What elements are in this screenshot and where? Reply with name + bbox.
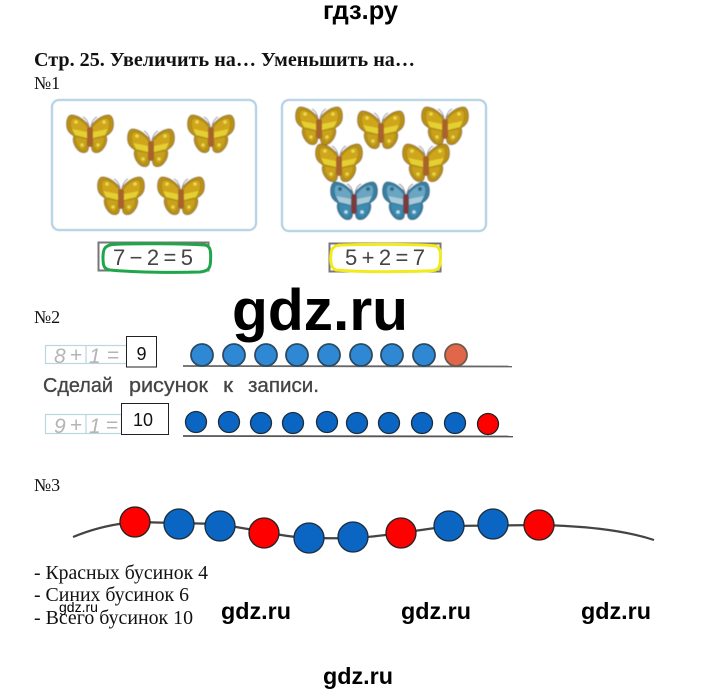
instruction text: Сделай — [43, 375, 113, 397]
page title: Стр. 25. Увеличить на… Уменьшить на… — [34, 49, 415, 71]
answer box 9: 9 — [136, 344, 147, 364]
small watermark: gdz.ru — [59, 599, 98, 615]
heading: task 1: №1 — [34, 73, 60, 93]
answer line: total beads: - Всего бусинок 10 — [34, 607, 193, 629]
curved thread — [73, 522, 654, 540]
printed equation in grid: 8 — [54, 345, 66, 368]
row of ten beads on a line — [183, 412, 513, 436]
bead string — [73, 507, 654, 553]
large watermark: gdz.ru — [232, 278, 408, 343]
answer box 10 — [122, 404, 168, 434]
instruction text: к — [223, 375, 233, 397]
butterfly group, left panel — [67, 115, 234, 215]
instruction text — [43, 375, 319, 397]
printed equation in grid: = — [106, 414, 118, 437]
example row: 8 + 1 = 9 — [46, 336, 512, 368]
watermark row: gdz.ru — [581, 598, 651, 624]
equation box: 5 + 2 = 7: 5 + 2 = 7 — [345, 245, 425, 270]
heading: task 3: №3 — [34, 475, 60, 495]
printed equation in grid: 1 — [89, 415, 101, 438]
panel: five yellow butterflies — [52, 100, 256, 230]
instruction text: рисунок — [129, 375, 208, 397]
butterfly group, right panel — [296, 107, 468, 220]
printed equation in grid: 1 — [89, 345, 101, 368]
printed equation in grid: 9 — [54, 415, 66, 438]
printed equation in grid: + — [70, 344, 82, 367]
printed equation in grid — [46, 344, 126, 368]
printed equation in grid — [46, 414, 122, 438]
equation box: 7 - 2 = 5 — [98, 242, 211, 272]
equation box: 7 - 2 = 5: 7 − 2 = 5 — [113, 245, 193, 270]
answer box 10: 10 — [133, 410, 153, 430]
answer row: 9 + 1 = 10 — [46, 404, 513, 438]
printed equation in grid: + — [70, 414, 82, 437]
beads — [120, 507, 554, 553]
answer line: red beads: - Красных бусинок 4 — [34, 562, 208, 584]
instruction text: записи. — [248, 375, 319, 397]
equation box: 5 + 2 = 7 — [330, 244, 441, 272]
printed equation in grid: = — [107, 344, 119, 367]
watermark row — [221, 598, 651, 624]
answer line: blue beads: - Синих бусинок 6 — [34, 584, 189, 606]
answer box 9 — [126, 336, 156, 367]
row of nine beads on a line — [183, 344, 512, 366]
panel: five yellow and two blue butterflies — [282, 100, 486, 231]
heading: task 2: №2 — [34, 307, 60, 327]
footer watermark: gdz.ru — [323, 663, 393, 689]
watermark row: gdz.ru — [401, 598, 471, 624]
watermark row: gdz.ru — [221, 598, 291, 624]
